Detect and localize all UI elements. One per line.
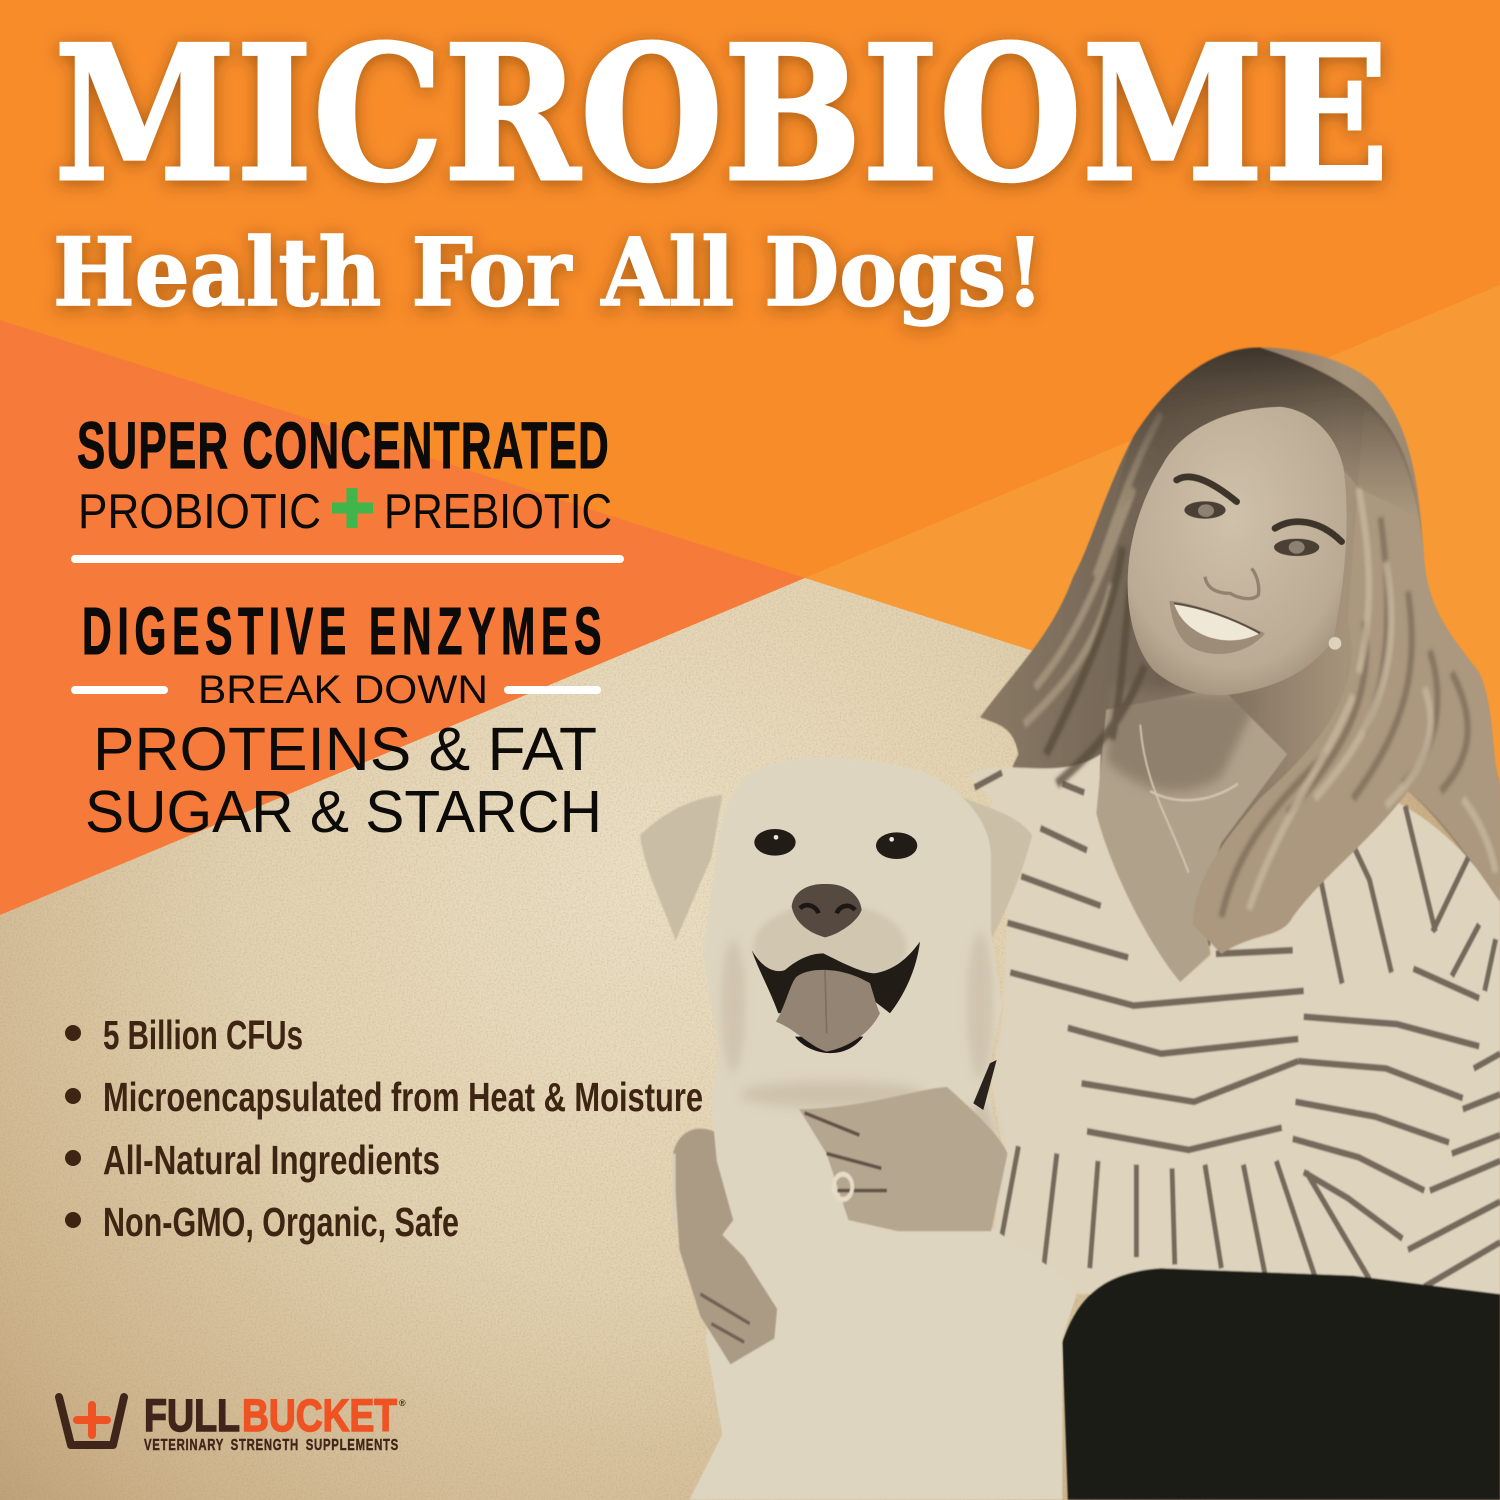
- icon: bucket with plus: [59, 1397, 124, 1445]
- bullet list: 5 Billion CFUs: [103, 1012, 303, 1058]
- dog muzzle shading: [754, 908, 906, 973]
- bullet list: Non-GMO, Organic, Safe: [103, 1199, 459, 1245]
- dog ears: [640, 791, 1032, 941]
- logo: Full Bucket: ®: [399, 1398, 406, 1408]
- woman eyes: [1184, 501, 1319, 556]
- background: light orange wedge: [805, 285, 1500, 800]
- text block: digestive enzymes: SUGAR & STARCH: [85, 779, 602, 845]
- dog fur shadow: [721, 934, 996, 1134]
- dog head details: [752, 829, 997, 1110]
- text block: super concentrated: [77, 408, 612, 539]
- background: kraft paper: [0, 560, 1500, 1500]
- dog collar edge shadow: [973, 1060, 997, 1110]
- woman hair lower locks: [1193, 407, 1500, 954]
- background: red-orange wedge: [0, 320, 805, 915]
- text block: digestive enzymes: BREAK DOWN: [198, 668, 488, 712]
- logo tagline: VETERINARY STRENGTH SUPPLEMENTS: [144, 1437, 399, 1454]
- bullet list: [65, 1012, 703, 1245]
- woman hair crown: [1124, 346, 1414, 498]
- woman necklace: [1140, 725, 1238, 873]
- dog nose: [792, 884, 862, 937]
- divider: main white rule: [71, 555, 624, 563]
- logo wordmark: FULL: [144, 1390, 240, 1441]
- woman nose: [1205, 568, 1259, 599]
- divider: short rules beside break down: [71, 686, 601, 694]
- dog eyes: [754, 829, 917, 859]
- dog lower lip: [795, 1037, 863, 1053]
- logo: Full Bucket: [59, 1390, 406, 1454]
- text block: super concentrated: SUPER CONCENTRATED: [77, 408, 610, 482]
- text block: digestive enzymes: [82, 594, 607, 845]
- bullet list: Microencapsulated from Heat & Moisture: [103, 1074, 703, 1120]
- icon: green plus: [332, 488, 373, 528]
- woman face: [1128, 407, 1347, 695]
- woman brows: [1177, 477, 1342, 542]
- woman pants: [1062, 1268, 1500, 1500]
- text block: super concentrated: PROBIOTIC: [78, 485, 321, 539]
- dog tongue: [776, 970, 880, 1052]
- text block: super concentrated: PREBIOTIC: [384, 485, 612, 539]
- woman right hand on dog: [799, 1087, 1007, 1231]
- woman smile: [1169, 601, 1265, 654]
- text block: digestive enzymes: PROTEINS & FAT: [93, 715, 597, 783]
- logo: Full Bucket: BUCKET: [242, 1390, 397, 1441]
- dog mouth: [752, 942, 920, 1013]
- subtitle: Health For All Dogs: Health For All Dogs!: [53, 218, 1044, 328]
- text block: digestive enzymes: DIGESTIVE ENZYMES: [82, 594, 607, 669]
- dog body: [689, 758, 1079, 1500]
- woman earring: [1329, 637, 1341, 650]
- woman hair: [980, 347, 1500, 954]
- bullet list: All-Natural Ingredients: [103, 1137, 440, 1183]
- woman neck and chest: [1096, 688, 1287, 982]
- photo: woman and dog: [640, 347, 1500, 1500]
- woman sweater: [969, 754, 1500, 1294]
- woman left hand on dog: [673, 1129, 777, 1364]
